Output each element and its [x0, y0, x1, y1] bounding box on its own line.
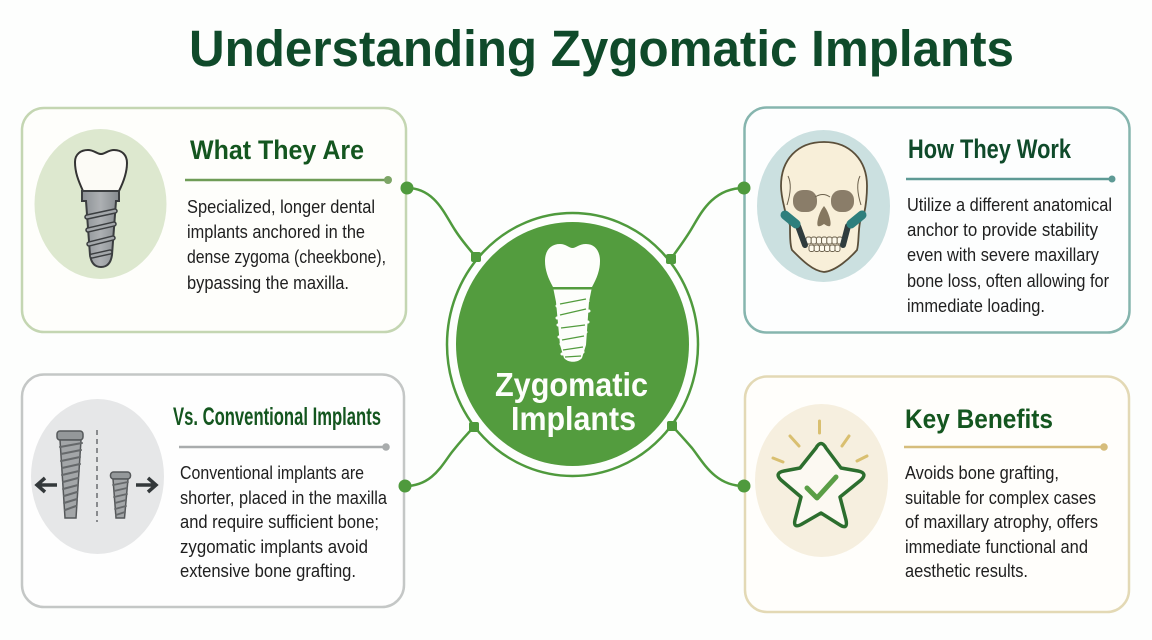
connector node: bottom left	[398, 480, 412, 492]
connector: bottom left	[405, 427, 474, 486]
hub label	[495, 366, 648, 437]
outer ring	[447, 213, 698, 476]
body text: Avoids bone grafting,	[905, 462, 1059, 483]
connector node: bottom right	[738, 480, 750, 492]
body text	[187, 196, 386, 293]
connector: bottom right	[672, 426, 744, 486]
body text: anchor to provide stability	[907, 219, 1099, 240]
card	[745, 376, 1129, 612]
body text: bone loss, often allowing for	[907, 270, 1109, 291]
hub label: Zygomatic	[495, 366, 648, 403]
body text: and require sufficient bone;	[180, 511, 379, 532]
body text: Utilize a different anatomical	[907, 194, 1112, 215]
heading: Key Benefits	[905, 404, 1053, 434]
body text: dense zygoma (cheekbone),	[187, 246, 386, 267]
connector node: top left	[400, 182, 414, 194]
connector node: top right	[738, 182, 750, 194]
body text: aesthetic results.	[905, 560, 1028, 581]
body text: even with severe maxillary	[907, 244, 1100, 265]
panel: how they work	[744, 108, 1130, 332]
card	[744, 108, 1130, 332]
card	[22, 108, 406, 332]
heading: Vs. Conventional Implants	[173, 403, 381, 431]
icon: skull	[781, 142, 867, 272]
card	[22, 374, 404, 607]
icon backdrop	[757, 130, 890, 282]
icon: star with check	[773, 421, 867, 527]
body text: bypassing the maxilla.	[187, 272, 349, 293]
body text: Specialized, longer dental	[187, 196, 375, 217]
icon backdrop	[755, 404, 888, 557]
icon: white implant	[545, 244, 600, 362]
heading rule	[904, 443, 1108, 451]
body text	[907, 194, 1112, 316]
hub label: Implants	[511, 400, 636, 437]
connector: top right	[671, 188, 744, 259]
heading rule	[185, 176, 392, 184]
icon backdrop	[31, 399, 164, 554]
body text: zygomatic implants avoid	[180, 536, 368, 557]
ring junctions	[469, 252, 677, 432]
panel: vs conventional implants	[22, 374, 404, 607]
body text: implants anchored in the	[187, 221, 365, 242]
heading rule	[906, 176, 1116, 182]
body text: Conventional implants are	[180, 462, 364, 483]
green disc	[456, 222, 689, 466]
panel: key benefits	[745, 376, 1129, 612]
heading rule	[179, 443, 390, 451]
body text	[180, 462, 388, 581]
icon: dental implant	[75, 150, 127, 267]
body text: of maxillary atrophy, offers	[905, 511, 1098, 532]
icon backdrop	[34, 129, 166, 279]
title: Understanding Zygomatic Implants	[189, 20, 1014, 77]
icon: implant comparison	[37, 430, 156, 522]
body text	[905, 462, 1098, 581]
body text: immediate functional and	[905, 536, 1088, 557]
body text: suitable for complex cases	[905, 487, 1096, 508]
panel: what they are	[22, 108, 406, 332]
heading: How They Work	[908, 134, 1072, 164]
central hub	[447, 213, 698, 476]
heading: What They Are	[190, 135, 364, 165]
body text: shorter, placed in the maxilla	[180, 487, 388, 508]
body text: extensive bone grafting.	[180, 560, 356, 581]
connector: top left	[407, 188, 476, 257]
body text: immediate loading.	[907, 295, 1045, 316]
